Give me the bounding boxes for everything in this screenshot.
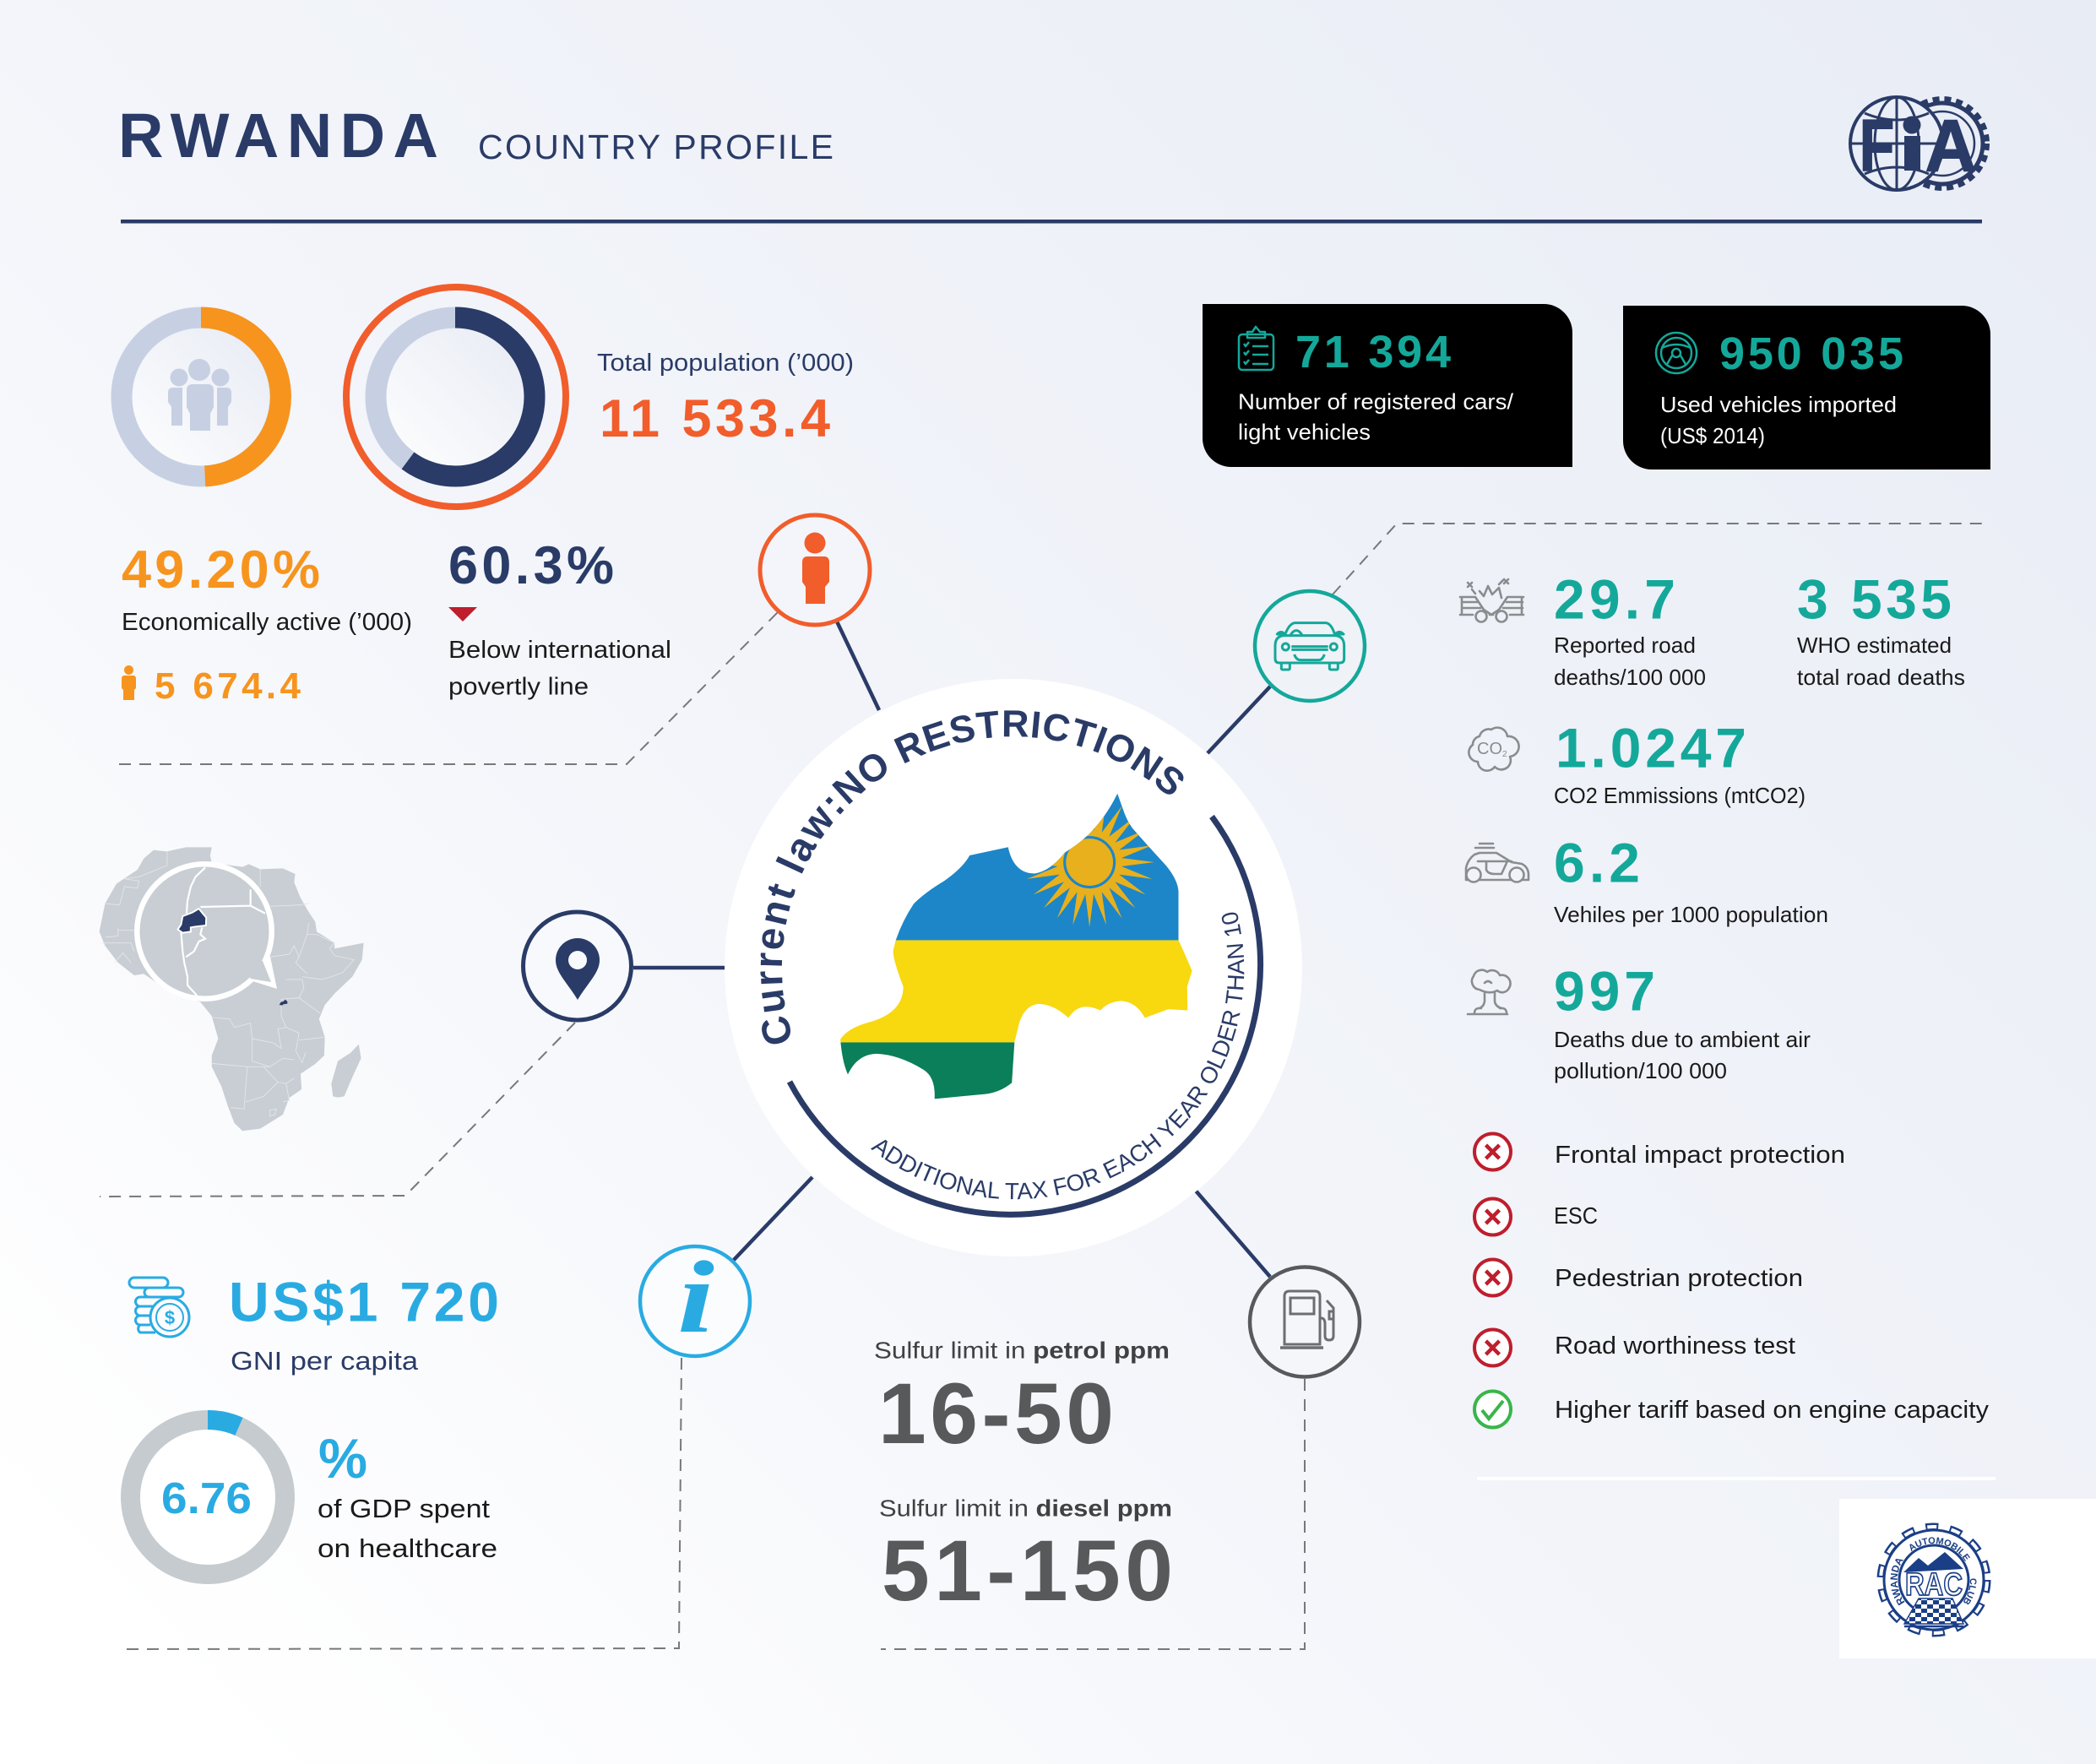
stat: road deaths <box>1460 567 1706 690</box>
stat: WHO estimated deaths <box>1797 567 1965 690</box>
map: Rwanda flag <box>831 787 1200 1106</box>
icon: orange person <box>122 665 136 700</box>
subtitle: country profile: COUNTRY PROFILE <box>478 128 834 166</box>
checklist <box>1474 1133 1990 1427</box>
icon: steering wheel <box>1656 333 1697 373</box>
dashed connector: GNI <box>120 1358 681 1649</box>
fuel: petrol: 16-50 <box>878 1365 1114 1462</box>
stat: vehicles per population <box>1466 831 1828 927</box>
stat: road deaths: deaths/100 000 <box>1554 665 1706 690</box>
black card: used vehicles imported: (US$ 2014) <box>1660 423 1765 448</box>
fuel: petrol: Sulfur limit in petrol ppm <box>874 1338 1170 1363</box>
icon: CO2 cloud: 2 <box>1502 750 1507 759</box>
stat: economically active <box>122 540 412 707</box>
stat: air pollution deaths <box>1468 959 1811 1083</box>
black card: used vehicles imported: Used vehicles imported <box>1660 392 1897 417</box>
item: pedestrian protection: Pedestrian protection <box>1555 1265 1803 1292</box>
stat: poverty: 60.3% <box>448 536 614 595</box>
logo: FIA: F <box>1860 106 1894 187</box>
icon circle: info <box>640 1240 750 1356</box>
curved text: additional tax: ADDITIONAL TAX FOR EACH YEAR OLDER THAN 10 <box>871 912 1245 1199</box>
icon: down triangle <box>448 607 477 621</box>
item: road worthiness test <box>1474 1329 1795 1366</box>
stat: WHO estimated deaths: WHO estimated <box>1797 632 1952 658</box>
icon circle: fuel pump <box>1250 1267 1360 1376</box>
health spending text: % <box>318 1427 367 1490</box>
donut: health spending: 6.76 <box>161 1474 252 1523</box>
fuel: petrol <box>874 1338 1170 1462</box>
icon circle: location pin <box>524 912 632 1020</box>
stat: vehicles per population: 6.2 <box>1554 831 1640 893</box>
item: higher tariff: Higher tariff based on engine capacity <box>1555 1397 1990 1424</box>
icon: car side <box>1466 844 1529 882</box>
fuel: diesel: Sulfur limit in diesel ppm <box>879 1495 1172 1522</box>
stat: WHO estimated deaths: total road deaths <box>1797 665 1965 690</box>
icon circle: car <box>1255 591 1365 701</box>
connector: fuel to centre <box>1195 1190 1270 1277</box>
logo: Rwanda Automobile Club: RWANDA <box>1890 1559 1905 1606</box>
logo: Rwanda Automobile Club: RAC <box>1905 1567 1963 1603</box>
item: ESC <box>1474 1199 1598 1235</box>
black card: registered vehicles <box>1203 304 1572 467</box>
black card: registered vehicles: Number of registered cars/ <box>1238 388 1514 414</box>
black card: registered vehicles: 71 394 <box>1295 327 1451 377</box>
health spending text <box>318 1427 497 1563</box>
stat: economically active: Economically active (’000) <box>122 609 412 636</box>
stat: air pollution deaths: Deaths due to ambient air <box>1554 1027 1811 1052</box>
GNI per capita: US$1 720 <box>229 1270 499 1332</box>
black card: registered vehicles: light vehicles <box>1238 419 1371 444</box>
icon: clipboard <box>1239 327 1273 370</box>
icon: pollution cloud <box>1468 970 1511 1014</box>
item: frontal impact protection: Frontal impact protection <box>1555 1142 1845 1169</box>
stat: economically active: 49.20% <box>122 540 320 600</box>
stat: vehicles per population: Vehiles per 1000 population <box>1554 902 1828 927</box>
icon circle: person <box>760 515 870 625</box>
stat: air pollution deaths: pollution/100 000 <box>1554 1058 1727 1083</box>
small Rwanda <box>280 1000 287 1006</box>
dashed connector: population <box>119 612 778 764</box>
item: higher tariff <box>1474 1392 1990 1427</box>
curved heading: current law: Current law:NO RESTRICTIONS <box>760 710 1184 1044</box>
item: pedestrian protection <box>1474 1260 1803 1295</box>
total population: Total population (’000) <box>597 350 854 377</box>
stat: WHO estimated deaths: 3 535 <box>1797 567 1952 630</box>
item: frontal impact protection <box>1474 1133 1845 1170</box>
stat: CO2: CO2 Emmissions (mtCO2) <box>1554 783 1805 808</box>
connector: population to centre <box>837 621 879 710</box>
icon: CO2 cloud <box>1469 728 1519 771</box>
logo: Rwanda Automobile Club: AUTOMOBILE <box>1909 1537 1970 1561</box>
callout bubble <box>134 861 277 1001</box>
logo: FIA <box>1850 97 1987 190</box>
icon: people <box>168 359 231 431</box>
stat: poverty <box>448 536 671 701</box>
black card: used vehicles imported: 950 035 <box>1719 328 1903 379</box>
total population <box>597 350 854 448</box>
donut: health spending <box>130 1419 285 1574</box>
icon circle: info: i <box>677 1240 714 1354</box>
logo: Rwanda Automobile Club <box>1839 1499 2096 1658</box>
donut: below poverty line <box>346 287 566 507</box>
arc <box>790 817 1260 1214</box>
logo: FIA: A <box>1925 106 1976 187</box>
icon: CO2 cloud: CO <box>1477 740 1502 758</box>
logo: Rwanda Automobile Club: CLUB <box>1963 1578 1976 1604</box>
Africa silhouette <box>100 847 364 1131</box>
stat: CO2: 1.0247 <box>1556 716 1746 779</box>
stat: poverty: Below international <box>448 637 671 664</box>
Madagascar <box>331 1045 361 1097</box>
stat: road deaths: 29.7 <box>1554 567 1675 630</box>
item: road worthiness test: Road worthiness test <box>1555 1332 1795 1360</box>
connector: vehicles to centre <box>1208 687 1270 753</box>
connector: location to centre <box>633 966 726 969</box>
donut: economically active <box>122 318 280 476</box>
GNI per capita <box>129 1270 499 1376</box>
stat: CO2 <box>1469 716 1805 808</box>
map: Africa with callout <box>100 847 364 1131</box>
item: ESC: ESC <box>1554 1202 1598 1229</box>
fuel: diesel: 51-150 <box>882 1522 1173 1619</box>
dashed connector: vehicles <box>1333 524 1990 594</box>
GNI per capita: GNI per capita <box>231 1346 419 1376</box>
icon: coins: $ <box>165 1307 175 1328</box>
total population: 11 533.4 <box>600 389 830 448</box>
black card: used vehicles imported <box>1623 306 1990 469</box>
health spending text: of GDP spent <box>318 1494 490 1523</box>
dashed connector: location <box>100 1023 575 1197</box>
stat: economically active: 5 674.4 <box>155 665 301 707</box>
icon: coins <box>129 1278 189 1337</box>
central white disc <box>725 679 1302 1257</box>
title: Rwanda: RWANDA <box>118 100 438 171</box>
stat: poverty: povertly line <box>448 674 589 701</box>
icon: car crash <box>1460 579 1523 621</box>
stat: air pollution deaths: 997 <box>1554 959 1655 1022</box>
connector: info to centre <box>733 1177 812 1261</box>
dashed connector: fuel <box>881 1379 1305 1649</box>
health spending text: on healthcare <box>318 1533 497 1563</box>
stat: road deaths: Reported road <box>1554 632 1696 658</box>
